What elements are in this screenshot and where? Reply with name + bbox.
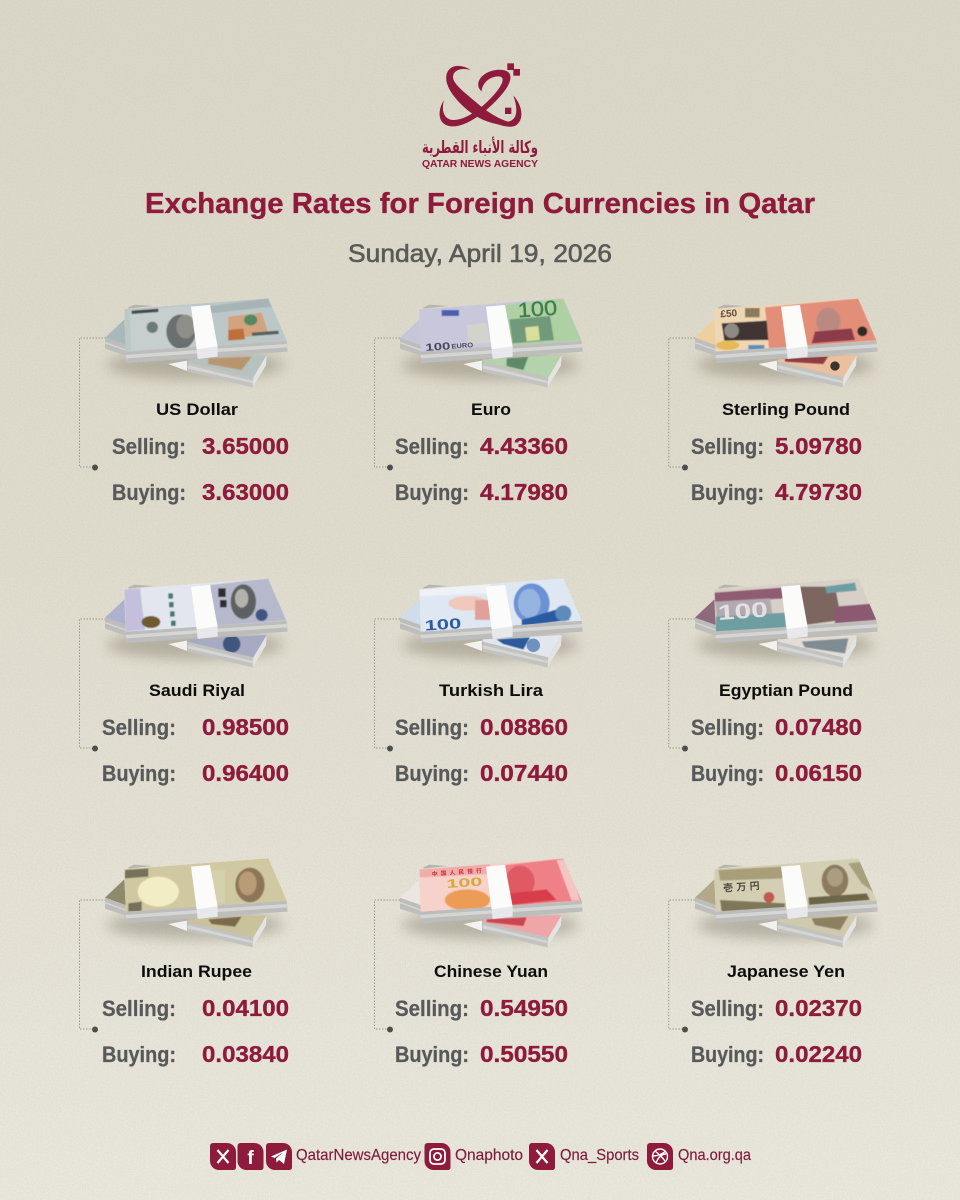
currency name: Egyptian Pound (719, 681, 853, 700)
card: Sterling Pound (669, 297, 882, 505)
icon: rupee stack (102, 857, 292, 947)
icon: dollar stack (102, 297, 292, 387)
connector (374, 338, 400, 470)
buying rate (691, 760, 862, 786)
handle: website: Qna.org.qa (678, 1147, 751, 1164)
card: Egyptian Pound (669, 577, 882, 786)
card: Saudi Riyal (80, 577, 292, 786)
icon: Instagram (424, 1143, 450, 1170)
connector (80, 338, 106, 470)
connector (669, 900, 695, 1032)
buying rate (112, 479, 289, 505)
selling rate: 3.65000 (202, 433, 289, 459)
buying rate (691, 1041, 862, 1067)
handle: Qnaphoto: Qnaphoto (455, 1147, 523, 1164)
selling rate (102, 995, 289, 1021)
selling rate: Selling: (691, 715, 764, 740)
buying rate: Buying: (102, 1042, 176, 1067)
icon: euro stack: EURO (451, 342, 473, 351)
buying rate: 0.02240 (775, 1041, 862, 1067)
buying rate: Buying: (395, 761, 469, 786)
selling rate: Selling: (395, 996, 469, 1021)
card: Chinese Yuan (374, 857, 587, 1067)
currency name: Chinese Yuan (434, 962, 548, 981)
buying rate: Buying: (691, 761, 764, 786)
logo emblem (440, 63, 521, 127)
buying rate: Buying: (691, 1042, 764, 1067)
selling rate: Selling: (395, 434, 469, 459)
selling rate (691, 433, 862, 459)
footer: social handles (210, 1143, 751, 1170)
card: Euro (374, 297, 587, 505)
connector (669, 338, 695, 470)
currency name: US Dollar (156, 400, 238, 419)
logo arabic name: وكالة الأنباء القطرية (422, 137, 538, 158)
buying rate: 0.06150 (775, 760, 862, 786)
card: Japanese Yen (669, 857, 882, 1067)
connector (374, 900, 400, 1032)
selling rate: Selling: (102, 715, 176, 740)
date: Sunday, April 19, 2026 (348, 240, 612, 268)
selling rate (395, 995, 568, 1021)
currency name: Indian Rupee (141, 962, 252, 981)
buying rate: 0.50550 (480, 1041, 568, 1067)
icon: yen stack (692, 857, 882, 947)
connector (80, 619, 106, 752)
handle: QatarNewsAgency: QatarNewsAgency (296, 1147, 421, 1164)
selling rate: 5.09780 (775, 433, 862, 459)
icon: pound stack (692, 297, 882, 387)
buying rate: 3.63000 (202, 479, 289, 505)
selling rate: Selling: (102, 996, 176, 1021)
icon: lira stack (397, 577, 587, 667)
icon: euro stack: 100 (425, 341, 451, 354)
buying rate (691, 479, 862, 505)
icon: X sports (529, 1143, 555, 1170)
logo: Qatar News Agency (422, 63, 538, 170)
icon: egyptian pound stack: 100 (717, 598, 769, 625)
selling rate: 0.07480 (775, 714, 862, 740)
icon: website (647, 1143, 673, 1170)
icon: yuan stack: 中国人民银行 (432, 867, 482, 878)
buying rate: 4.79730 (775, 479, 862, 505)
handle: Qna_Sports: Qna_Sports (560, 1147, 639, 1164)
connector (80, 900, 106, 1032)
card: Indian Rupee (80, 857, 292, 1067)
selling rate: Selling: (691, 996, 764, 1021)
buying rate (102, 1041, 289, 1067)
selling rate: 0.98500 (202, 714, 289, 740)
selling rate (395, 433, 568, 459)
icon: yen stack: 壱万円 (722, 877, 760, 895)
card: US Dollar (80, 297, 292, 505)
selling rate (112, 433, 289, 459)
icon: Facebook (238, 1143, 264, 1170)
selling rate: 0.04100 (202, 995, 289, 1021)
icon: yuan stack: 100 (446, 874, 483, 891)
selling rate: Selling: (395, 715, 469, 740)
buying rate: 0.03840 (202, 1041, 289, 1067)
buying rate (102, 760, 289, 786)
buying rate (395, 760, 568, 786)
icon: egyptian pound stack (692, 577, 882, 667)
connector (374, 619, 400, 752)
icon: Telegram (266, 1143, 292, 1170)
icon: X (210, 1143, 236, 1170)
icon: yuan stack (397, 857, 587, 947)
selling rate: 4.43360 (480, 433, 568, 459)
buying rate: 4.17980 (480, 479, 568, 505)
card: Turkish Lira (374, 577, 587, 786)
selling rate: 0.08860 (480, 714, 568, 740)
icon: riyal stack (102, 577, 292, 667)
icon: euro stack (397, 297, 587, 387)
currency name: Turkish Lira (439, 681, 544, 700)
icon: euro stack: 100 (517, 297, 558, 322)
connector (669, 619, 695, 752)
currency name: Euro (471, 400, 511, 419)
currency name: Sterling Pound (722, 400, 850, 419)
icon: Facebook: f (247, 1148, 254, 1169)
icon: lira stack: 100 (424, 616, 462, 635)
buying rate (395, 1041, 568, 1067)
buying rate: 0.07440 (480, 760, 568, 786)
selling rate (102, 714, 289, 740)
buying rate: 0.96400 (202, 760, 289, 786)
selling rate: 0.54950 (480, 995, 568, 1021)
buying rate: Buying: (395, 1042, 469, 1067)
buying rate: Buying: (395, 480, 469, 505)
currency name: Saudi Riyal (149, 681, 245, 700)
selling rate: Selling: (112, 434, 186, 459)
selling rate: Selling: (691, 434, 764, 459)
currency name: Japanese Yen (727, 962, 845, 981)
icon: pound stack: £50 (720, 308, 738, 320)
title: Exchange Rates for Foreign Currencies in Qatar (145, 188, 815, 220)
buying rate: Buying: (102, 761, 176, 786)
logo english name: QATAR NEWS AGENCY (422, 158, 538, 170)
selling rate: 0.02370 (775, 995, 862, 1021)
selling rate (691, 995, 862, 1021)
buying rate (395, 479, 568, 505)
selling rate (395, 714, 568, 740)
selling rate (691, 714, 862, 740)
buying rate: Buying: (112, 480, 186, 505)
buying rate: Buying: (691, 480, 764, 505)
